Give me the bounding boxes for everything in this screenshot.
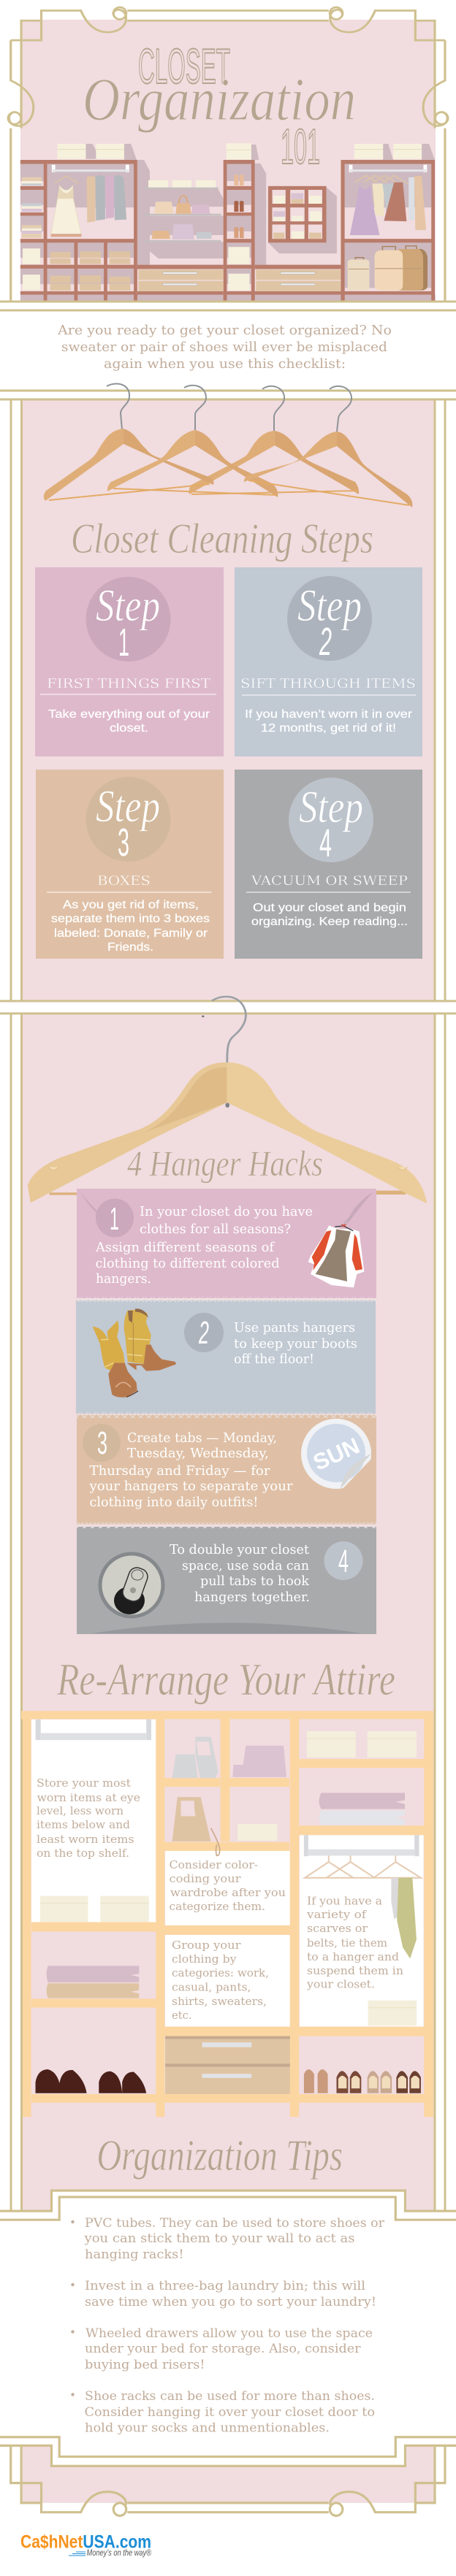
header ornamental frame (8, 7, 448, 302)
section panel: closet cleaning (0, 391, 456, 1001)
title: CLOSET (138, 39, 230, 94)
tips list: hanging racks! (85, 2247, 184, 2261)
bullets (71, 2220, 75, 2396)
hack 3: Tuesday, Wednesday, (127, 1446, 269, 1461)
shelf text: group clothing: etc. (172, 2009, 191, 2022)
hack 3: clothing into daily outfits! (89, 1495, 259, 1510)
step card 1: Take everything out of your (48, 708, 210, 721)
storage boxes (40, 1731, 417, 2025)
icon: cowboy boots (93, 1308, 176, 1398)
scarves (391, 1878, 400, 1919)
hack 3: Create tabs — Monday, (127, 1430, 277, 1446)
men's shoes (36, 2069, 146, 2093)
white text panels (31, 1720, 423, 2027)
intro text: sweater or pair of shoes will ever be misplaced (61, 340, 387, 355)
wooden frame (21, 1711, 433, 2117)
shelf text: eye level: level, less worn (37, 1804, 123, 1817)
title: 101 (281, 119, 320, 175)
step card 3: Step (96, 782, 160, 832)
right hanging clothes (372, 183, 384, 216)
tips list: Shoe racks can be used for more than shoes. (85, 2389, 375, 2403)
hanger 1 (44, 429, 214, 501)
icon: soda can tab (100, 1554, 163, 1617)
shelf text: color coding: categorize them. (170, 1900, 265, 1913)
shelf text: group clothing (172, 1939, 269, 2022)
step card 2 (235, 567, 422, 756)
header panel background (20, 20, 436, 302)
title: Organization (83, 66, 356, 134)
shelf text: eye level: Store your most (37, 1776, 131, 1790)
step card 4: Out your closet and begin (253, 902, 406, 914)
hanger 3 (189, 431, 359, 494)
icon: SUN sticker (301, 1419, 373, 1491)
hack 3: Thursday and Friday — for (89, 1463, 270, 1479)
shelf text: scarves: belts, tie them (307, 1936, 387, 1950)
shelf text: color coding: coding your (170, 1872, 241, 1885)
drawers (165, 2036, 290, 2094)
tips list: under your bed for storage. Also, consider (85, 2342, 361, 2355)
shelf text: eye level (37, 1776, 140, 1860)
shelf text: eye level: least worn items (37, 1833, 134, 1846)
step card 4 (235, 770, 422, 959)
tips list (71, 2216, 384, 2434)
hack 2 (76, 1300, 376, 1414)
icon: fur coat (308, 1216, 364, 1287)
hack 3 (77, 1415, 376, 1525)
hack 1: 1 (110, 1201, 119, 1237)
illustration: closet (20, 143, 436, 301)
shelf text: scarves: If you have a (307, 1894, 382, 1907)
central tower (224, 143, 255, 301)
hanger 4 (244, 432, 412, 507)
tips frame (0, 2190, 456, 2515)
shelf text: color coding (170, 1858, 286, 1913)
step card 2: 2 (319, 620, 332, 664)
hanger 2 (107, 430, 278, 497)
shelf text: scarves: variety of (306, 1908, 368, 1921)
hack 4: To double your closet (170, 1542, 310, 1557)
heading: organization tips: Organization Tips (96, 2131, 343, 2180)
tips list: Wheeled drawers allow you to use the space (86, 2326, 373, 2340)
rail 1 (36, 1720, 151, 1740)
drawers (135, 265, 345, 301)
step card 4: Step (299, 783, 363, 832)
hack 1: clothing to different colored (95, 1256, 279, 1271)
left closet unit (20, 160, 436, 301)
wall shelves with bags (144, 180, 221, 242)
step card 2: 12 months, get rid of it! (261, 722, 396, 735)
hack 1: hangers. (96, 1271, 151, 1287)
step card 4: organizing. Keep reading... (251, 916, 408, 928)
shelf text: color coding: wardrobe after you (170, 1886, 286, 1899)
step card 2: Step (297, 581, 362, 631)
white notch in header top (126, 11, 330, 20)
step card 4: 4 (319, 821, 332, 865)
hanging rail (52, 165, 129, 172)
hack 1: clothes for all seasons? (140, 1222, 291, 1237)
luggage (348, 259, 369, 291)
shelf text: scarves: your closet. (306, 1977, 375, 1990)
icon: SUN sticker: SUN (309, 1433, 363, 1476)
shelf text: group clothing: casual, pants, (172, 1980, 251, 1993)
hack 4: space, use soda can (182, 1558, 309, 1573)
shelf text: group clothing: Group your (172, 1939, 241, 1952)
step card 3: 3 (118, 821, 129, 865)
intro text: Are you ready to get your closet organized? No (57, 323, 392, 338)
heading: closet cleaning steps: Closet Cleaning Steps (71, 515, 373, 562)
tips list: PVC tubes. They can be used to store shoes or (85, 2216, 384, 2230)
step card 3: As you get rid of items, (63, 899, 199, 911)
folded stacks (22, 177, 42, 181)
shelf text: eye level: on the top shelf. (37, 1847, 129, 1860)
stitching between hack panels (77, 1296, 376, 1528)
closet shelving panel (21, 1711, 433, 2117)
intro text (57, 323, 392, 372)
hack 4: hangers together. (194, 1590, 310, 1605)
hack 1: In your closet do you have (140, 1204, 313, 1219)
shelf text: color coding: Consider color- (170, 1858, 258, 1871)
step card 3 (36, 770, 224, 959)
header bottom bands (0, 302, 456, 310)
hack 1: Assign different seasons of (95, 1240, 275, 1255)
tips list: hold your socks and unmentionables. (85, 2421, 330, 2434)
step card 3: labeled: Donate, Family or (54, 927, 208, 940)
hack 4 (77, 1527, 376, 1634)
hack 3: your hangers to separate your (88, 1479, 293, 1494)
top storage boxes (57, 144, 422, 159)
section panel: hacks, rearrange, tips (0, 1013, 456, 2211)
hooks (107, 384, 352, 432)
cream dress (51, 185, 81, 235)
shelf text: eye level: worn items at eye (37, 1791, 140, 1804)
step card 1: Step (96, 581, 160, 631)
tips list: save time when you go to sort your laundry! (85, 2295, 376, 2309)
shelf text: group clothing: categories: work, (172, 1966, 269, 1979)
heading: 4 hanger hacks: 4 Hanger Hacks (127, 1143, 323, 1184)
wall shadows (86, 144, 435, 265)
hack 4: pull tabs to hook (200, 1573, 310, 1589)
hack 2: off the floor! (234, 1352, 314, 1367)
hanging coats (87, 176, 96, 223)
tips list: you can stick them to your wall to act as (83, 2231, 354, 2245)
shelf text: group clothing: clothing by (172, 1952, 237, 1966)
hack 2: Use pants hangers (234, 1320, 355, 1335)
hack 4: 4 (338, 1544, 349, 1579)
step card 1 (35, 567, 224, 756)
folded stacks (47, 1966, 139, 1982)
step card 4: VACUUM OR SWEEP (251, 873, 408, 889)
step card 3: separate them into 3 boxes (51, 913, 210, 925)
step card 1: 1 (118, 621, 129, 664)
step card 2: SIFT THROUGH ITEMS (240, 676, 416, 691)
tips list: buying bed risers! (85, 2358, 205, 2372)
title (83, 39, 356, 175)
step card 1: FIRST THINGS FIRST (47, 676, 210, 691)
shelf text: eye level: items below and (37, 1818, 130, 1831)
handbags (172, 1737, 218, 1778)
tips list: Invest in a three-bag laundry bin; this will (85, 2279, 365, 2293)
large hanger (28, 997, 427, 1203)
ladies' shoes (304, 2069, 328, 2093)
intro text: again when you use this checklist: (104, 356, 346, 372)
shelf text: scarves: suspend them in (307, 1964, 403, 1977)
hack 2: 2 (198, 1315, 209, 1351)
rail 2 and hangers (304, 1835, 419, 1856)
shelf text: scarves: to a hanger and (307, 1950, 399, 1963)
shelf text: scarves (306, 1894, 403, 1990)
step card 3: BOXES (97, 873, 151, 889)
tips list: Consider hanging it over your closet door to (85, 2405, 375, 2419)
hack 3: 3 (97, 1425, 107, 1461)
right closet unit (341, 160, 435, 301)
step card 2: If you haven’t worn it in over (245, 708, 413, 721)
hack 1 (77, 1189, 376, 1298)
four wooden hangers (44, 384, 412, 507)
shelf text: group clothing: shirts, sweaters, (172, 1995, 267, 2008)
shelf text: scarves: scarves or (307, 1922, 368, 1935)
cube organizer (268, 186, 327, 242)
step card 3: Friends. (107, 941, 153, 954)
logo: CashNetUSA: Ca$hNetUSA.com (20, 2532, 151, 2553)
lavender dress (350, 185, 379, 235)
step card 1: closet. (110, 722, 148, 735)
logo: CashNetUSA: Money’s on the way® (86, 2549, 151, 2558)
hack 2: to keep your boots (234, 1336, 357, 1352)
